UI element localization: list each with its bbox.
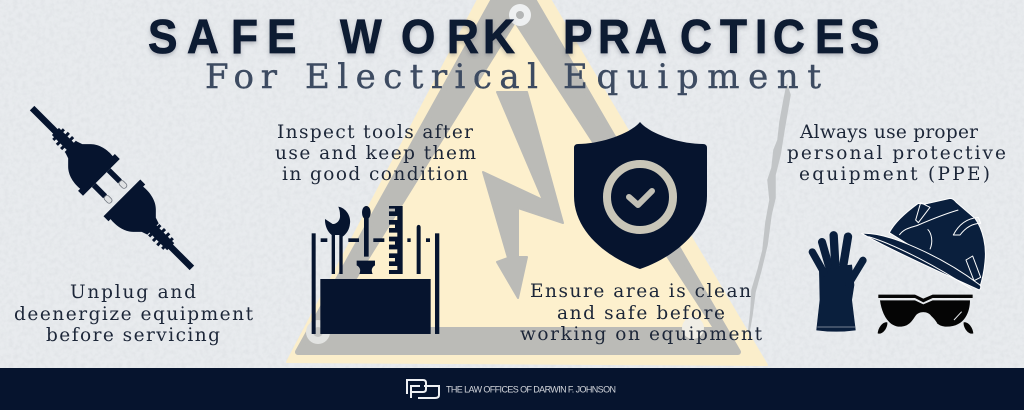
- subtitle: Electrical: [305, 57, 538, 97]
- rivet right: [682, 317, 704, 339]
- title: PRACTICES: [563, 9, 879, 63]
- text: unplug: [14, 282, 254, 346]
- icon: safety glasses: [878, 295, 973, 334]
- subtitle: For: [205, 57, 278, 97]
- text: unplug: Unplug and: [70, 282, 196, 303]
- text: always use ppe: equipment (PPE): [799, 164, 990, 185]
- rivet top: [509, 4, 531, 26]
- icon: unplugged cord: [14, 90, 210, 286]
- footer bar: [0, 368, 1024, 410]
- subtitle: [205, 57, 821, 97]
- subtitle: Equipment: [563, 57, 821, 97]
- text: inspect tools: Inspect tools after: [277, 122, 473, 143]
- text: unplug: deenergize equipment: [14, 304, 254, 325]
- wall crack: [748, 85, 790, 338]
- text: ensure area: Ensure area is clean: [530, 281, 751, 302]
- lightning bolt: [483, 92, 563, 298]
- icon: hard hat: [862, 198, 985, 290]
- text: ensure area: [520, 281, 763, 345]
- title: SAFE: [148, 9, 296, 63]
- icon: toolbox: [312, 206, 439, 334]
- text: always use ppe: [787, 122, 1006, 185]
- icon: rubber glove: [812, 235, 863, 331]
- text: ensure area: and safe before: [557, 303, 725, 324]
- text: inspect tools: use and keep them: [275, 143, 476, 164]
- warning triangle background: [287, 0, 767, 365]
- rivet left: [306, 320, 330, 344]
- text: inspect tools: [275, 122, 476, 185]
- icon: law office logo: [407, 380, 439, 398]
- text: inspect tools: in good condition: [282, 164, 468, 185]
- firm name: THE LAW OFFICES OF DARWIN F. JOHNSON: [446, 384, 616, 394]
- text: unplug: before servicing: [46, 325, 220, 346]
- title: [148, 9, 879, 63]
- title: WORK: [340, 9, 515, 63]
- text: ensure area: working on equipment: [520, 324, 763, 345]
- icon: shield with check: [574, 122, 707, 269]
- text: always use ppe: Always use proper: [799, 122, 978, 143]
- text: always use ppe: personal protective: [787, 143, 1006, 164]
